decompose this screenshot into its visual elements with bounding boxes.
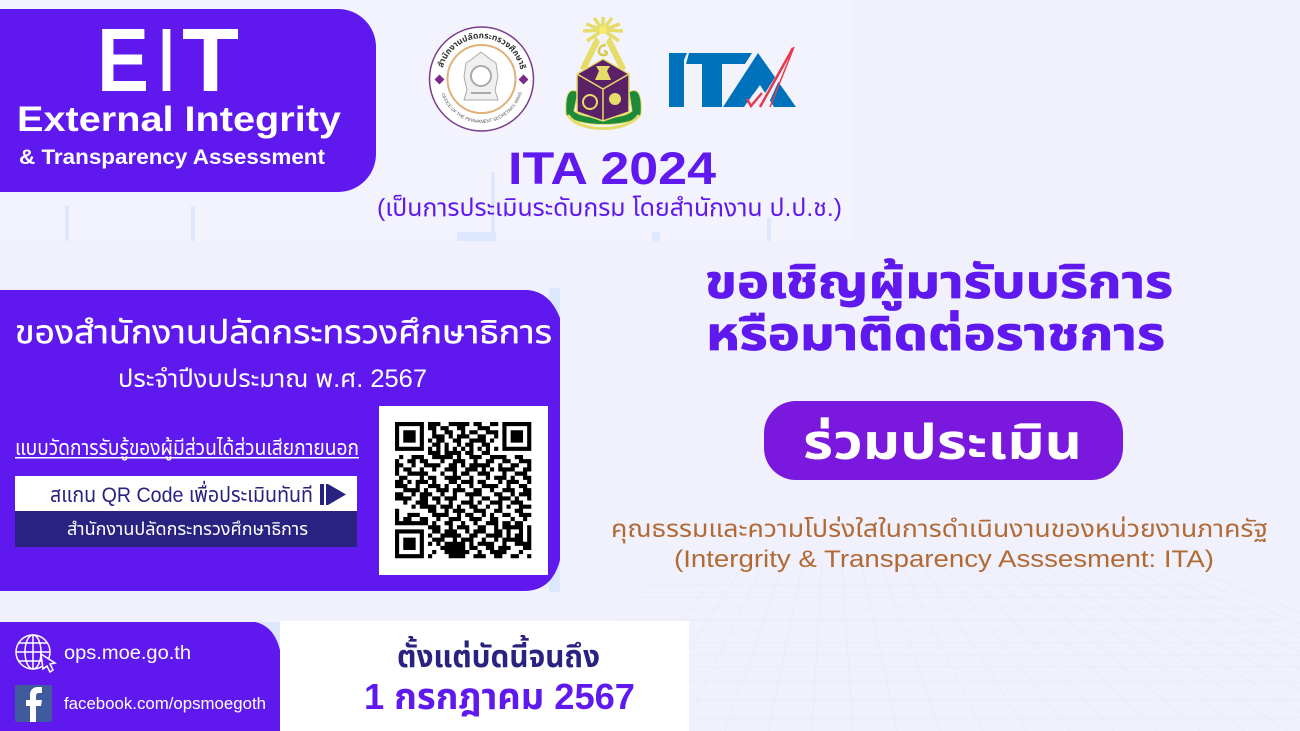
text: deadline date: 1 กรกฎาคม 2567 bbox=[364, 676, 635, 717]
callout: office band bbox=[15, 511, 357, 547]
callout: scan QR: สแกน QR Code เพื่อประเมินทันที bbox=[50, 480, 313, 507]
text: ITA description bbox=[611, 515, 1268, 573]
text: assessment level: (เป็นการประเมินระดับกรม โดยสำนักงาน ป.ป.ช.) bbox=[377, 194, 842, 222]
button: join assessment bbox=[764, 401, 1123, 480]
icon: globe bbox=[16, 635, 55, 672]
button: join assessment: ร่วมประเมิน bbox=[803, 416, 1082, 470]
heading: EIT bbox=[97, 11, 239, 111]
heading: External Integrity: External Integrity bbox=[17, 100, 342, 139]
heading: invitation bbox=[705, 256, 1173, 360]
callout: scan QR bbox=[15, 476, 357, 511]
QR code bbox=[379, 406, 548, 575]
callout: office band: สำนักงานปลัดกระทรวงศึกษาธิการ bbox=[67, 519, 308, 539]
panel: QR survey bbox=[0, 290, 560, 591]
icon: ITA logo bbox=[669, 47, 796, 107]
heading: invitation: หรือมาติดต่อราชการ bbox=[706, 308, 1165, 360]
link: survey title: แบบวัดการรับรู้ของผู้มีส่วนได้ส่วนเสียภายนอก bbox=[15, 436, 359, 461]
text: facebook page: facebook.com/opsmoegoth bbox=[64, 694, 266, 713]
text: fiscal year: ประจำปีงบประมาณ พ.ศ. 2567 bbox=[118, 365, 427, 393]
heading: EIT: I bbox=[159, 11, 174, 111]
heading: office name: ของสำนักงานปลัดกระทรวงศึกษาธิการ bbox=[15, 314, 552, 350]
panel: contact links bbox=[0, 622, 280, 731]
icon: ministry seal bbox=[428, 26, 534, 132]
icon: facebook bbox=[15, 685, 52, 722]
panel: deadline bbox=[280, 621, 689, 731]
heading: EIT: E bbox=[97, 11, 149, 111]
text: ITA description: (Intergrity & Transparency Asssesment: ITA) bbox=[674, 546, 1214, 573]
heading: invitation: ขอเชิญผู้มารับบริการ bbox=[705, 256, 1173, 310]
icon: play arrow bbox=[320, 484, 346, 505]
heading: ITA 2024: ITA 2024 bbox=[508, 143, 716, 194]
panel: EIT header bbox=[0, 9, 376, 192]
subheading: Transparency Assessment: & Transparency Assessment bbox=[19, 146, 325, 169]
icon: royal emblem bbox=[566, 17, 641, 128]
heading: EIT: T bbox=[182, 11, 239, 111]
text: ITA description: คุณธรรมและความโปร่งใสในการดำเนินงานของหน่วยงานภาครัฐ bbox=[611, 515, 1268, 544]
text: from now until: ตั้งแต่บัดนี้จนถึง bbox=[397, 634, 600, 674]
text: website: ops.moe.go.th bbox=[64, 643, 191, 664]
